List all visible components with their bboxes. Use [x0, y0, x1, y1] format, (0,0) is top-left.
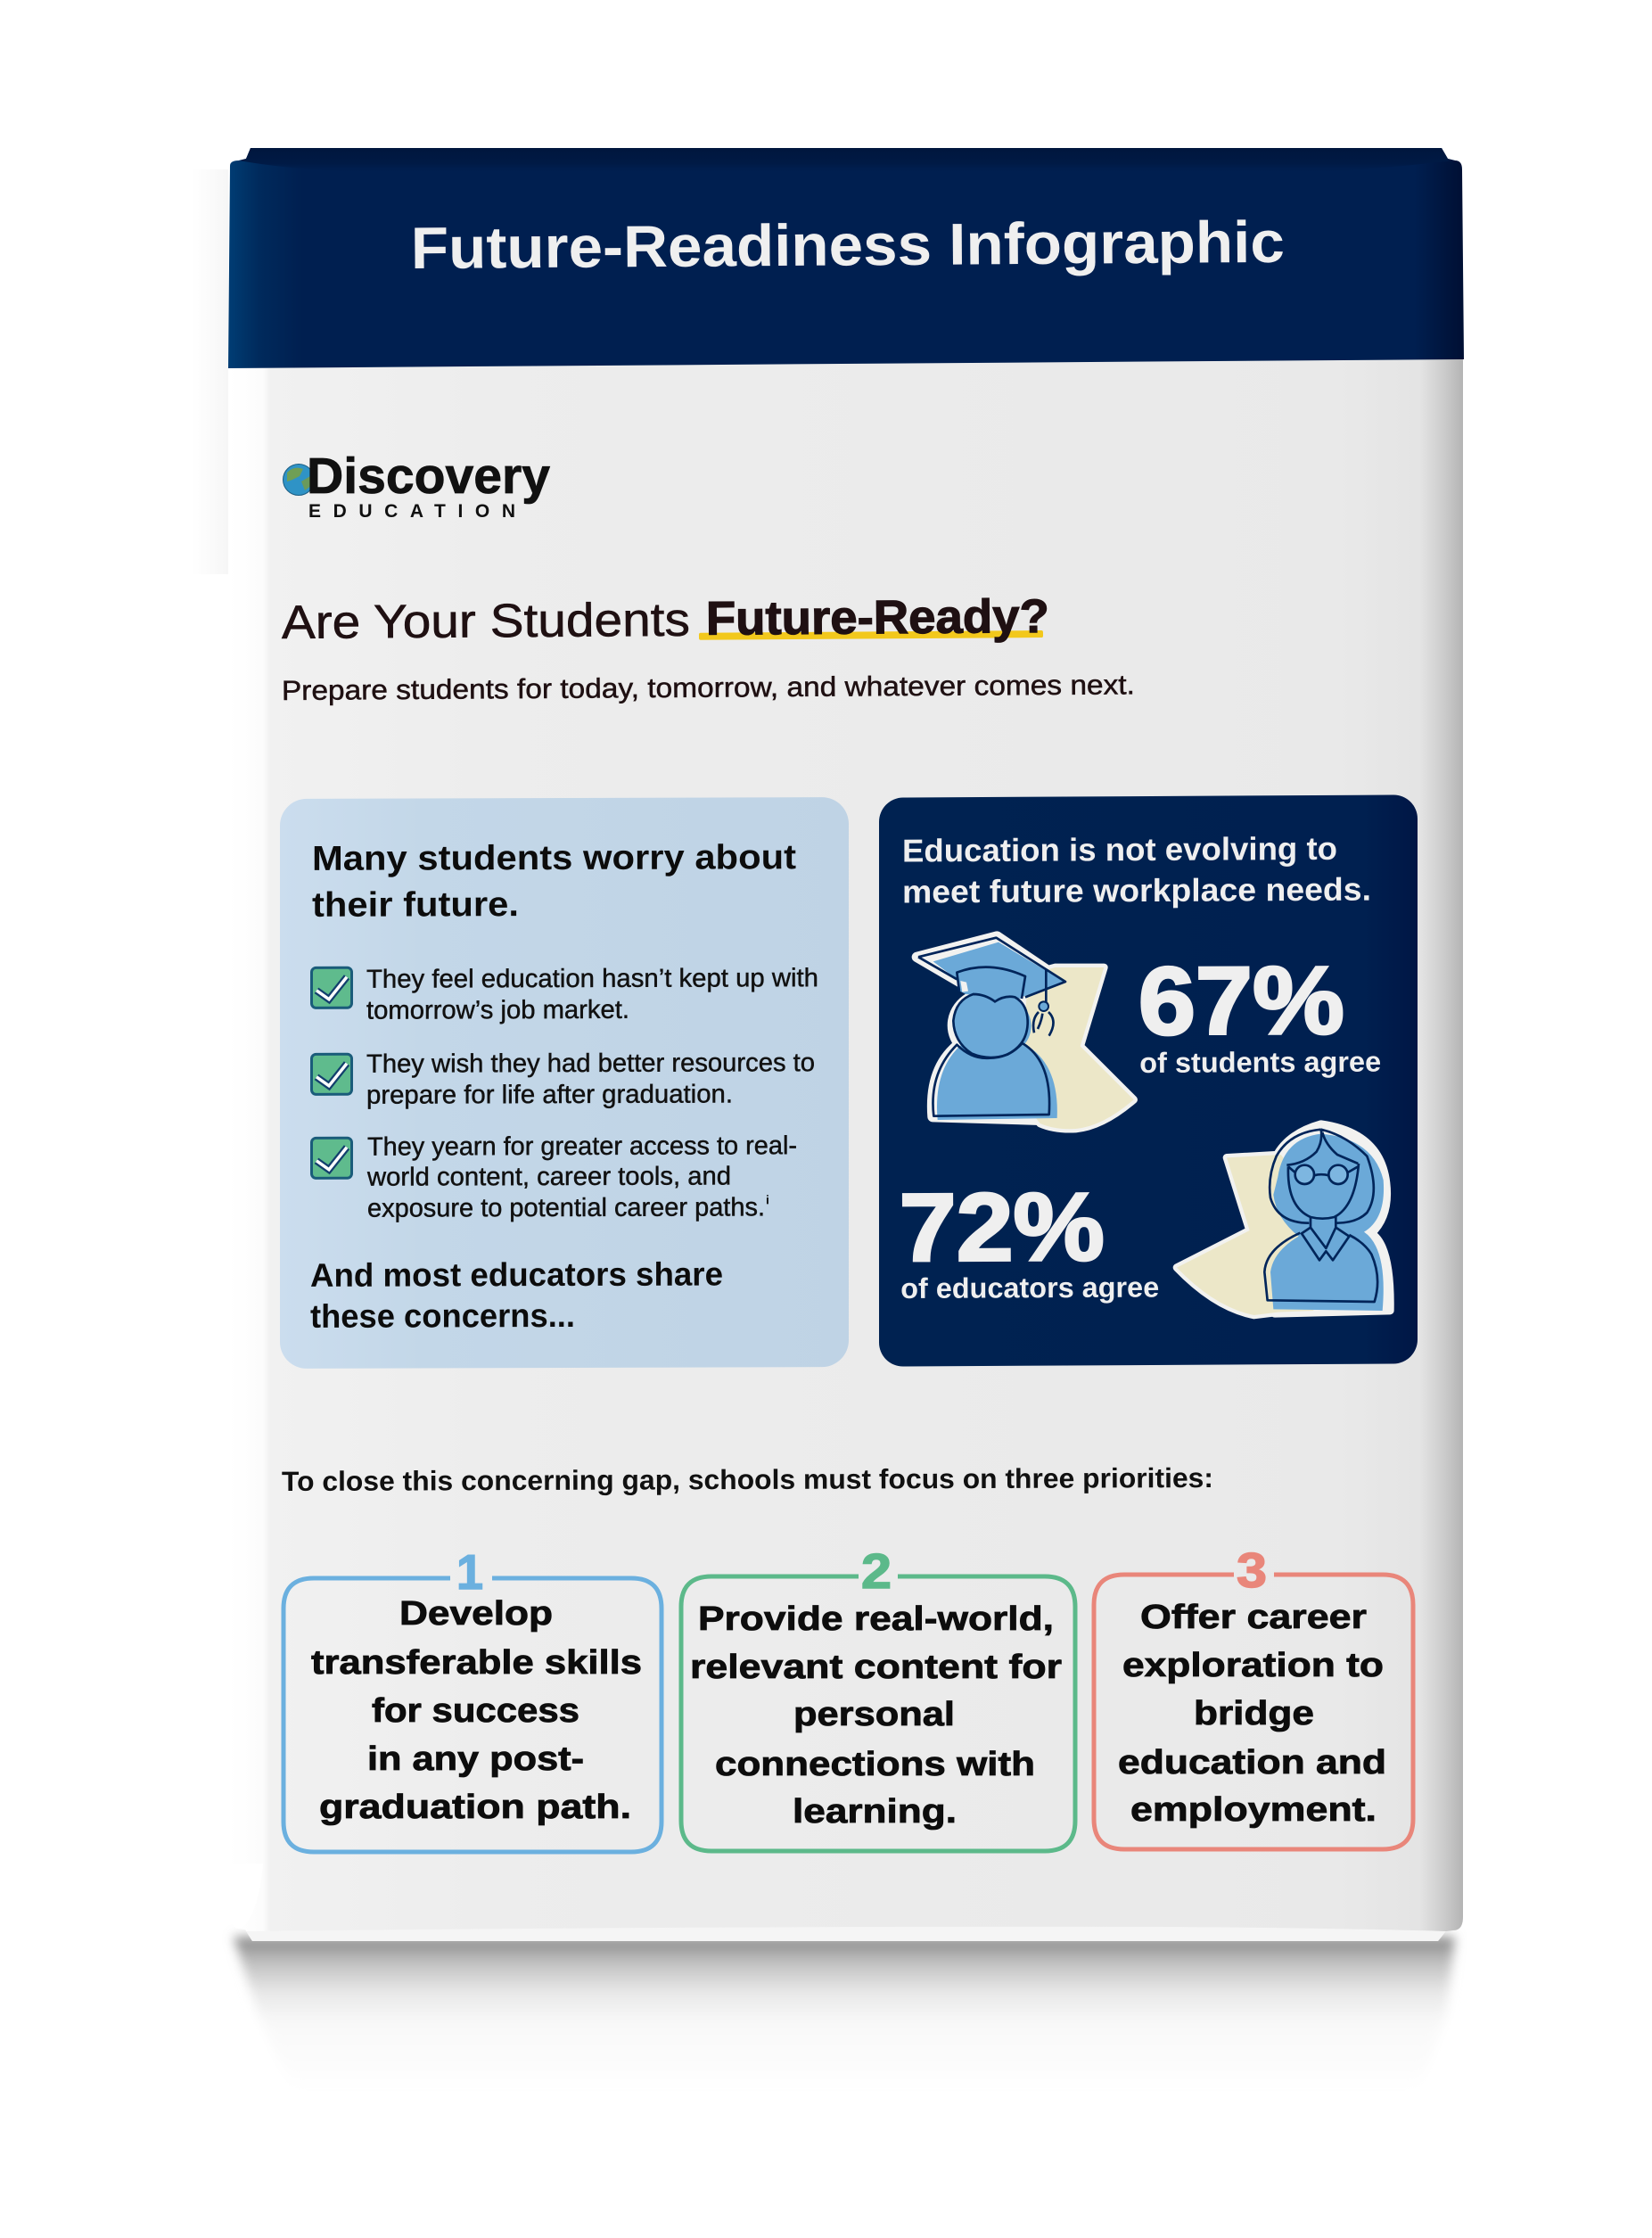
- cream backdrop: [1177, 1155, 1313, 1315]
- heading: Future-Ready?: [706, 590, 1049, 646]
- number 1: 1: [456, 1544, 483, 1600]
- list item 2: prepare for life after graduation.: [366, 1080, 733, 1110]
- icon: educator with glasses: [1177, 1124, 1390, 1315]
- list item 3: They yearn for greater access to real-: [367, 1131, 797, 1162]
- bottom lip highlight: [246, 1927, 1446, 1941]
- list item 3: exposure to potential career paths.: [367, 1193, 765, 1223]
- panel heading: Many students worry about: [312, 838, 796, 878]
- priority card 1: [284, 1544, 662, 1852]
- cap highlight: [960, 981, 968, 992]
- closing statement: these concerns...: [310, 1297, 575, 1335]
- closing statement: And most educators share: [310, 1255, 723, 1294]
- card 2 text: relevant content for: [690, 1649, 1062, 1686]
- panel heading: meet future workplace needs.: [902, 871, 1371, 910]
- closing statement: [310, 1255, 723, 1335]
- body: [933, 1043, 1049, 1116]
- cap base: [957, 967, 1025, 999]
- priority card 3: [1094, 1543, 1413, 1849]
- card 2 text: [690, 1600, 1062, 1831]
- card 1 text: Develop: [399, 1595, 553, 1633]
- white sticker outline: [916, 936, 1065, 1121]
- white sticker outline: [1262, 1124, 1390, 1313]
- logo: Discovery Education: Discovery: [307, 448, 550, 505]
- card 2 text: personal: [793, 1696, 955, 1733]
- stat: 67 percent of students: of students agree: [1139, 1046, 1381, 1079]
- icon: checkbox 1: [312, 967, 351, 1008]
- stat: 72 percent of educators: of educators agree: [900, 1271, 1159, 1304]
- logo: Discovery Education: EDUCATION: [308, 501, 515, 522]
- card 3 text: Offer career: [1140, 1599, 1367, 1636]
- booklet mockup: [228, 148, 1464, 1941]
- list item 1: They feel education hasn’t kept up with: [366, 964, 818, 994]
- stat: 67 percent of students: [1138, 946, 1381, 1079]
- body: [1264, 1233, 1377, 1302]
- drop shadow under booklet: [234, 1937, 1455, 2095]
- card 1 text: graduation path.: [319, 1789, 631, 1826]
- stat: 72 percent of educators: [899, 1172, 1159, 1304]
- card 1 text: [311, 1595, 642, 1826]
- card 3 text: employment.: [1130, 1791, 1377, 1829]
- subheading: Prepare students for today, tomorrow, and whatever comes next.: [282, 669, 1135, 706]
- cream backdrop: [1019, 967, 1134, 1129]
- number 2: 2: [861, 1543, 892, 1599]
- blue offset layers: [933, 942, 1065, 996]
- stat: 67 percent of students: 67%: [1138, 946, 1344, 1055]
- priority card 2: [681, 1543, 1075, 1851]
- heading: [282, 590, 1049, 649]
- list item 1: [366, 964, 818, 1025]
- icon: checkbox 3: [312, 1138, 351, 1178]
- section intro: To close this concerning gap, schools must focus on three priorities:: [282, 1462, 1213, 1497]
- panel heading: their future.: [312, 885, 519, 925]
- list item 1: tomorrow’s job market.: [366, 996, 629, 1025]
- heading: Are Your Students: [282, 594, 690, 649]
- icon: globe: [284, 464, 314, 496]
- card 1 text: transferable skills: [311, 1644, 642, 1682]
- stat: 72 percent of educators: 72%: [899, 1172, 1105, 1281]
- card 1 text: for success: [372, 1692, 579, 1730]
- cap lines: [918, 938, 1065, 997]
- list item 3: [366, 1131, 797, 1223]
- list item 3: i: [766, 1192, 769, 1206]
- card 3 text: exploration to: [1122, 1647, 1384, 1684]
- card 3 text: [1118, 1599, 1386, 1829]
- card 3 text: bridge: [1194, 1695, 1314, 1732]
- booklet body: [228, 352, 1463, 1941]
- panel heading: [312, 838, 796, 925]
- blue back layer: [1270, 1134, 1384, 1311]
- card 2 text: connections with: [715, 1746, 1035, 1783]
- header band: [228, 148, 1464, 368]
- neck and collar: [1302, 1217, 1349, 1260]
- list item 2: [366, 1049, 815, 1110]
- hair lines: [1270, 1130, 1374, 1223]
- panel: students worry: [280, 797, 849, 1369]
- card 2 text: Provide real-world,: [698, 1600, 1054, 1638]
- list item 3: world content, career tools, and: [366, 1162, 731, 1192]
- tassel: [1033, 969, 1054, 1036]
- list item 2: They wish they had better resources to: [366, 1049, 815, 1079]
- face: [1288, 1164, 1359, 1219]
- panel heading: Education is not evolving to: [902, 830, 1337, 869]
- icon: checkbox 2: [312, 1054, 351, 1094]
- title: Future-Readiness Infographic: [411, 209, 1285, 281]
- card 1 text: in any post-: [367, 1740, 584, 1778]
- glasses: [1288, 1165, 1358, 1184]
- number 3: 3: [1237, 1543, 1267, 1598]
- card 2 text: learning.: [793, 1793, 957, 1831]
- icon: student with graduation cap: [916, 936, 1134, 1129]
- lower left white edge: [229, 1864, 263, 1929]
- card 3 text: education and: [1118, 1744, 1386, 1781]
- yellow underline: [699, 630, 1043, 640]
- panel heading: [902, 830, 1371, 910]
- panel: education not evolving: [879, 794, 1418, 1367]
- head: [953, 994, 1028, 1057]
